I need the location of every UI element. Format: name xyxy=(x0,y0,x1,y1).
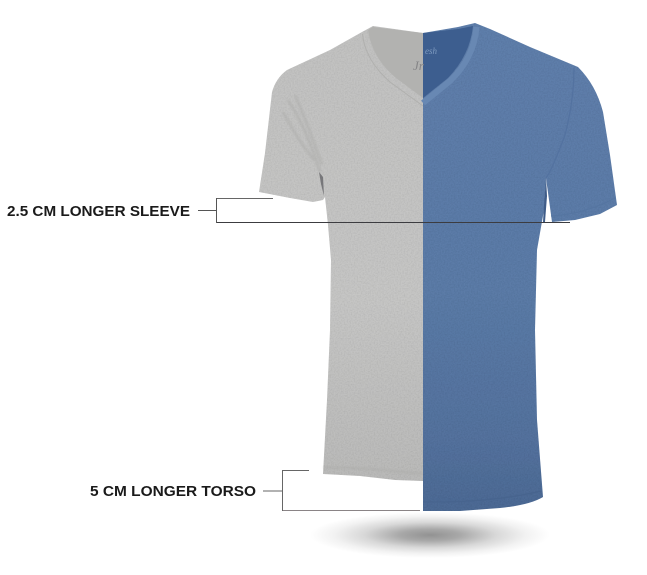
gray collar band xyxy=(362,34,423,106)
blue collar band xyxy=(423,27,476,103)
torso bracket lower line xyxy=(282,510,420,512)
neck label print xyxy=(413,46,437,73)
sleeve bracket upper line xyxy=(216,198,273,200)
label text gray side: Jr xyxy=(413,58,425,73)
sleeve bracket lower line xyxy=(216,222,570,224)
blue inner neck xyxy=(423,26,473,98)
blue hem fold xyxy=(423,491,541,502)
gray armpit crease xyxy=(319,172,324,196)
sleeve label: 2.5 CM LONGER SLEEVE xyxy=(7,204,190,220)
gray sleeve folds xyxy=(283,95,322,172)
floor shadow xyxy=(310,512,550,558)
blue sleeve hem xyxy=(551,198,615,216)
sleeve bracket side and tick xyxy=(198,198,216,223)
blue shoulder seam xyxy=(546,68,574,178)
torso bracket xyxy=(263,470,420,511)
blue half of t-shirt xyxy=(423,23,617,511)
gray half of t-shirt xyxy=(259,26,423,481)
torso bracket side and tick xyxy=(263,470,282,511)
torso label: 5 CM LONGER TORSO xyxy=(90,484,256,500)
gray inner neck xyxy=(368,27,423,98)
torso bracket upper line xyxy=(282,470,309,472)
gray hem fold xyxy=(324,467,423,474)
blue body and sleeve xyxy=(423,23,617,511)
blue armpit shade xyxy=(543,178,547,222)
sleeve bracket xyxy=(198,198,570,223)
label text blue side: esh xyxy=(425,46,437,56)
gray body and sleeve xyxy=(259,26,423,481)
